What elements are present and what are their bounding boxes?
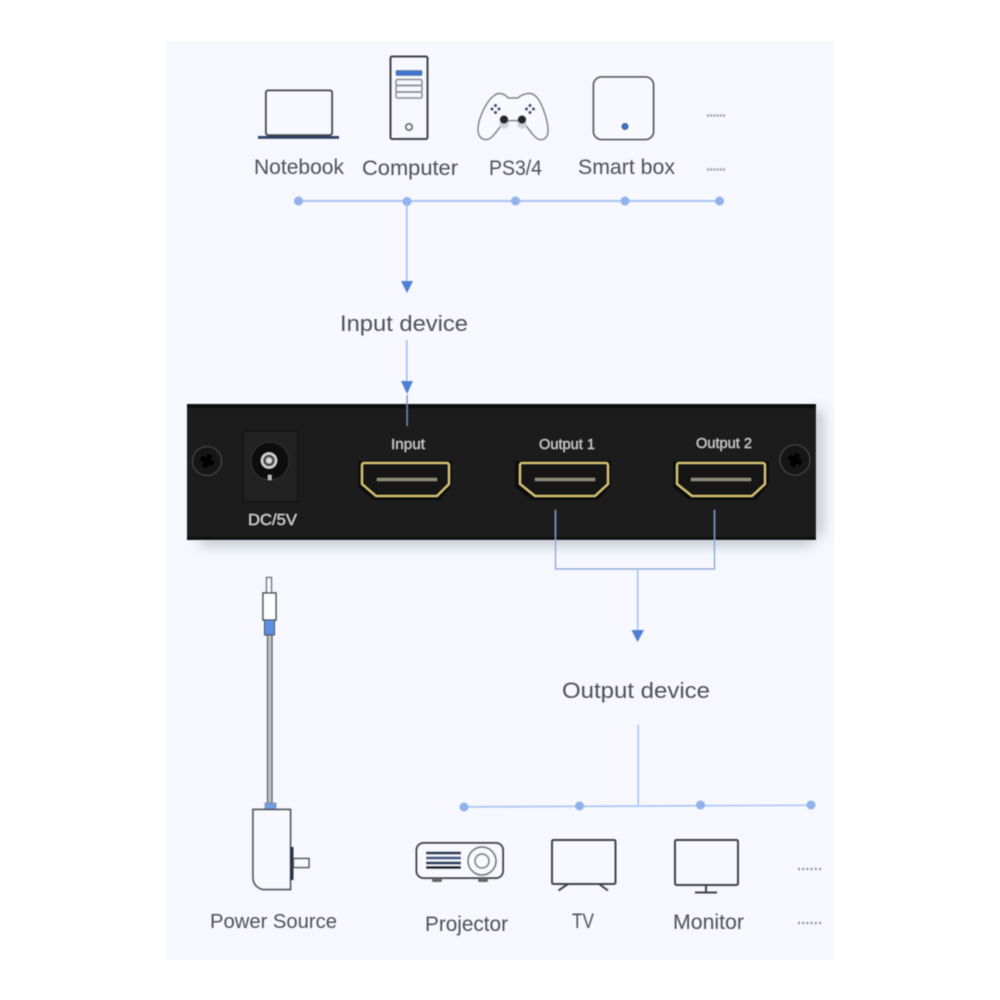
icon: power cable and adapter: [253, 578, 309, 890]
output device labels: Projector: [425, 913, 508, 936]
icon: game controller: [478, 94, 548, 140]
icon: computer tower: [390, 56, 428, 139]
icon: smart box: [594, 77, 654, 140]
label: Input: Input: [391, 436, 426, 453]
device labels: Smart box: [578, 155, 675, 179]
HDMI port: output 1: [515, 461, 611, 500]
background panel: [166, 41, 834, 960]
label: Output 1: Output 1: [539, 436, 595, 453]
output device labels: Monitor: [673, 911, 744, 934]
device labels: PS3/4: [489, 156, 542, 180]
HDMI port: input: [358, 461, 452, 500]
label: Power Source: Power Source: [210, 910, 337, 933]
icon: screw left: [192, 446, 222, 476]
input devices group: [187, 56, 823, 936]
arrow: to input device: [401, 202, 413, 293]
output device labels: [425, 910, 744, 936]
input connector line: [294, 196, 724, 206]
output connector bracket: [556, 510, 714, 569]
arrow: to output device: [632, 569, 644, 642]
panel: HDMI splitter device: [187, 404, 816, 540]
device labels: [254, 155, 675, 180]
output device labels: TV: [572, 910, 594, 933]
label: DC/5V: DC/5V: [248, 512, 298, 529]
heading: output device: Output device: [562, 678, 710, 703]
label: Output 2: Output 2: [696, 435, 752, 452]
more outputs placeholder: [798, 869, 823, 923]
device labels: Computer: [362, 156, 458, 180]
HDMI port: output 2: [673, 461, 769, 500]
device labels: Notebook: [254, 155, 344, 179]
output connector line: [460, 725, 816, 812]
DC power jack: [243, 431, 298, 502]
icon: monitor: [675, 840, 738, 892]
heading: input device: Input device: [340, 311, 468, 336]
icon: notebook: [258, 90, 339, 139]
more devices placeholder: [707, 116, 726, 170]
icon: projector: [416, 843, 503, 882]
adapter shadow: [200, 410, 822, 545]
arrow: to input port: [401, 340, 413, 394]
icon: screw right: [780, 445, 810, 475]
input drop line on device: [406, 395, 408, 426]
icon: TV: [552, 840, 616, 890]
